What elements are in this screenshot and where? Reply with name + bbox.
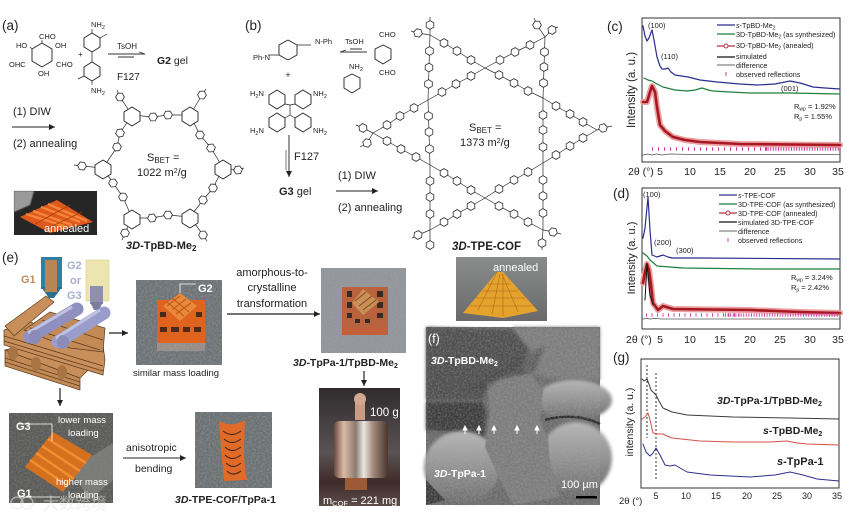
monomer: dimethyl benzidine: NH — [91, 20, 102, 29]
surface area label: 2 — [497, 138, 501, 145]
compound name: 2 — [192, 244, 197, 253]
curve labels: 2 — [818, 401, 822, 408]
peak labels and fit values: R — [794, 112, 799, 121]
chart frame and tick labels: 20 — [744, 334, 756, 346]
arrow to photo G2 — [109, 332, 128, 334]
monomer: triformylphloroglucinol: OHC — [9, 60, 26, 69]
compound name: 3D-TpBD-Me — [126, 240, 192, 252]
monomer: terephthal imine: + — [285, 70, 291, 80]
equilibrium arrows with products: TsOH — [345, 37, 364, 46]
legend: 3D-TpBD-Me — [736, 30, 778, 39]
panel: (a) TpBD-Me2 synthesis — [2, 18, 244, 253]
legend: 2 — [778, 34, 781, 40]
monomer: tetraaminophenylethene: N — [258, 126, 264, 135]
peak labels and fit values — [648, 21, 836, 122]
peak labels and fit values: (300) — [676, 246, 694, 255]
chart frame and tick labels: 15 — [714, 166, 726, 178]
watermark — [11, 494, 107, 513]
axis title y: intensity (a. u.) — [624, 388, 636, 456]
monomer: triformylphloroglucinol: OH — [38, 69, 49, 78]
arrow to G3 gel: G3 gel — [279, 186, 311, 198]
surface area label: /g — [501, 137, 510, 149]
surface area label — [137, 152, 187, 179]
arrow down to G3 photo — [59, 388, 61, 406]
arrow to G3 gel — [279, 135, 319, 198]
equilibrium arrows with products: 2 — [360, 67, 363, 73]
chart frame and tick labels: 5 — [657, 334, 663, 346]
equilibrium arrows with products: CHO — [379, 30, 396, 39]
chart frame and tick labels: 25 — [774, 334, 786, 346]
curves — [643, 197, 840, 319]
photo: bent scaffold — [195, 412, 272, 488]
chart frame and tick labels: 20 — [744, 166, 756, 178]
equilibrium arrows with products: CHO — [379, 68, 396, 77]
chart frame and tick labels: 25 — [774, 166, 786, 178]
axis title y: Intensity (a. u.) — [626, 222, 638, 294]
molecular network: 3D-TPE-COF — [356, 17, 612, 250]
process step: DIW and annealing — [336, 170, 402, 214]
surface area label: 2 — [174, 168, 178, 175]
monomer: triformylphloroglucinol: CHO — [39, 32, 56, 41]
surface area label: = — [170, 152, 179, 164]
monomer: triformylphloroglucinol: HO — [16, 41, 27, 50]
watermark: 大数跨境 — [43, 494, 107, 513]
photo: similar mass loading scaffold: G2 — [198, 283, 213, 295]
curve labels: s-TpBD-Me — [763, 425, 818, 437]
chart frame and tick labels: 2θ (°) — [628, 166, 654, 178]
text and arrow: anisotropic bending — [123, 442, 186, 475]
printer illustration — [4, 257, 109, 390]
peak labels and fit values: = 2.42% — [799, 283, 829, 292]
monomer: triformylphloroglucinol: + — [78, 50, 83, 59]
legend: difference — [738, 227, 769, 236]
text and arrow: anisotropic bending: anisotropic — [126, 442, 177, 454]
legend: s-TPE-COF — [738, 191, 776, 200]
monomer: tetraaminophenylethene: NH — [313, 126, 324, 135]
monomer: tetraaminophenylethene: 2 — [255, 131, 258, 137]
monomer: tetraaminophenylethene: H — [250, 126, 255, 135]
monomer: triformylphloroglucinol — [9, 32, 83, 78]
photo: composite scaffold — [321, 268, 406, 353]
monomer: tetraaminophenylethene: 2 — [324, 131, 327, 137]
monomer: tetraaminophenylethene — [250, 89, 327, 137]
surface area label: = — [492, 122, 501, 134]
photo: 100 g weight on scaffold — [319, 388, 400, 508]
curve labels: 2 — [818, 431, 822, 438]
monomer: tetraaminophenylethene: NH — [313, 89, 324, 98]
legend: observed reflections — [738, 236, 803, 245]
monomer: terephthal imine: Ph-N — [253, 53, 270, 62]
printer illustration: or — [70, 275, 82, 287]
arrow to photo TpPa-1/TpBD-Me2 — [227, 313, 320, 315]
peak labels and fit values: = 1.92% — [806, 102, 836, 111]
photo: 100 g weight on scaffold: m — [323, 495, 332, 507]
legend: s-TpBD-Me — [736, 21, 773, 30]
photo: annealed pyramid: annealed — [493, 262, 538, 274]
surface area label: BET — [154, 156, 170, 165]
chart frame and tick labels — [626, 188, 844, 346]
panel: (e) direct ink writing process — [2, 250, 547, 508]
monomer: dimethyl benzidine: NH — [91, 86, 102, 95]
monomer: terephthal imine: N-Ph — [315, 37, 332, 46]
legend: 3D-TpBD-Me — [736, 41, 778, 50]
arrow to G3 gel: F127 — [294, 151, 319, 163]
monomer: tetraaminophenylethene: 2 — [324, 94, 327, 100]
text: transformation step: crystalline — [248, 282, 296, 294]
monomer: terephthal imine — [253, 37, 332, 80]
panel: (f) SEM image — [424, 327, 612, 505]
legend: 2 — [778, 46, 781, 52]
region label TpBD-Me2: 3D-TpBD-Me — [431, 355, 494, 367]
chart frame and tick labels: 30 — [804, 166, 816, 178]
legend: 3D-TPE-COF (annealed) — [738, 209, 818, 218]
reaction arrow to G2 gel: TsOH — [117, 42, 137, 51]
panel: (b) TPE-COF synthesis — [245, 17, 612, 253]
reaction arrow to G2 gel: F127 — [117, 72, 140, 83]
monomer: tetraaminophenylethene: 2 — [255, 94, 258, 100]
process step: DIW and annealing: (2) annealing — [338, 202, 402, 214]
peak labels and fit values: = 1.55% — [802, 112, 832, 121]
monomer: triformylphloroglucinol: OH — [55, 41, 66, 50]
label (d): (d) — [613, 186, 630, 201]
peak labels and fit values: R — [791, 273, 796, 282]
panel: (d) PXRD of TPE-COF — [613, 186, 844, 346]
legend — [717, 21, 835, 79]
axis title y: Intensity (a. u.) — [626, 52, 638, 128]
interface arrows — [463, 426, 539, 434]
panel: (g) PXRD comparison — [613, 350, 842, 507]
monomer: dimethyl benzidine — [78, 20, 107, 97]
photo: annealed lattice — [14, 191, 97, 235]
chart frame and tick labels: 10 — [684, 334, 696, 346]
surface area label: S — [469, 122, 476, 134]
chart frame and tick labels: 30 — [802, 491, 812, 501]
region label TpPa-1: 3D-TpPa-1 — [434, 468, 486, 480]
peak labels and fit values: p — [796, 288, 799, 294]
compound name: 3D-TPE-COF/TpPa-1 — [175, 494, 276, 506]
photo: G3 on lattice: higher mass — [56, 477, 108, 488]
molecular network: 3D-TpBD-Me2 — [74, 89, 244, 241]
peak labels and fit values: p — [799, 116, 802, 122]
chart frame and tick labels: 5 — [653, 491, 659, 501]
process step: DIW and annealing: (2) annealing — [13, 138, 77, 150]
peak labels and fit values: (200) — [654, 238, 672, 247]
text and arrow: anisotropic bending: bending — [135, 463, 173, 475]
monomer: tetraaminophenylethene: N — [258, 89, 264, 98]
peak labels and fit values: R — [794, 102, 799, 111]
photo: 100 g weight on scaffold: 100 g — [370, 407, 399, 419]
surface area label — [460, 122, 510, 149]
surface area label: S — [147, 152, 154, 164]
surface area label: BET — [476, 126, 492, 135]
equilibrium arrows with products: NH — [349, 62, 360, 71]
chart frame and tick labels: 25 — [772, 491, 782, 501]
reaction arrow to G2 gel — [108, 42, 188, 83]
peak labels and fit values: (110) — [661, 52, 678, 61]
legend: simulated — [736, 52, 767, 61]
scale bar: 100 µm — [561, 479, 598, 491]
photo: annealed pyramid — [456, 257, 547, 321]
photo: G3 on lattice: G1 — [17, 488, 32, 500]
label (b): (b) — [245, 18, 262, 33]
photo: G3 on lattice: lower mass — [58, 415, 106, 426]
curve labels: s-TpPa-1 — [777, 456, 823, 468]
chart frame and tick labels: 15 — [711, 491, 721, 501]
chart frame and tick labels — [628, 18, 844, 178]
peak labels and fit values: = 3.24% — [803, 273, 833, 282]
photo: G3 on lattice: loading — [68, 490, 99, 501]
panel: (c) PXRD of TpBD-Me2 — [607, 18, 844, 178]
monomer: tetraaminophenylethene: H — [250, 89, 255, 98]
surface area label: 1373 m — [460, 137, 497, 149]
photo: similar mass loading scaffold — [136, 280, 222, 365]
chart frame and tick labels: 2θ (°) — [619, 496, 642, 507]
process step: DIW and annealing: (1) DIW — [13, 106, 52, 118]
chart frame and tick labels: 2θ (°) — [626, 334, 652, 346]
printer illustration: G3 — [67, 290, 82, 302]
label (c): (c) — [607, 19, 623, 34]
chart frame and tick labels: 20 — [742, 491, 752, 501]
reaction arrow to G2 gel: G2 gel — [157, 55, 188, 67]
photo: 100 g weight on scaffold: COF — [332, 499, 348, 508]
curves — [643, 26, 840, 155]
curves and guide lines — [642, 365, 839, 481]
legend: difference — [736, 61, 767, 70]
chart frame and tick labels: 10 — [684, 166, 696, 178]
monomer: dimethyl benzidine: 2 — [102, 91, 105, 97]
monomer: dimethyl benzidine: 2 — [102, 25, 105, 31]
peak labels and fit values — [643, 190, 833, 294]
scale bar — [561, 479, 598, 498]
label (g): (g) — [613, 350, 630, 365]
peak labels and fit values: (100) — [643, 190, 661, 199]
chart frame and tick labels: 35 — [832, 166, 844, 178]
surface area label: /g — [178, 167, 187, 179]
peak labels and fit values: wp — [796, 278, 803, 284]
chart frame and tick labels: 35 — [832, 334, 844, 346]
legend: 2 — [773, 26, 776, 32]
text: transformation step: transformation — [237, 298, 307, 310]
legend — [719, 191, 835, 245]
region label (f): (f) — [428, 332, 440, 346]
legend: (anealed) — [781, 41, 814, 50]
peak labels and fit values: (001) — [781, 84, 799, 93]
chart frame and tick labels: 35 — [832, 491, 842, 501]
equilibrium arrows with products — [340, 30, 396, 93]
chart frame and tick labels — [619, 359, 842, 507]
SEM background and regions — [424, 327, 612, 505]
photo: annealed lattice: annealed — [44, 223, 89, 235]
process step: DIW and annealing: (1) DIW — [338, 170, 376, 182]
printer illustration: G1 — [21, 274, 36, 286]
legend: simulated 3D-TPE-COF — [738, 218, 814, 227]
peak labels and fit values: R — [791, 283, 796, 292]
label (a): (a) — [2, 18, 18, 33]
peak labels and fit values: wp — [799, 106, 806, 112]
chart frame and tick labels: 30 — [804, 334, 816, 346]
printer illustration: G2 — [67, 260, 82, 272]
caption: similar mass loading — [133, 368, 219, 379]
photo: G3 on lattice: G3 — [16, 421, 31, 433]
photo: G3 on lattice: loading — [68, 428, 99, 439]
process step: DIW and annealing — [12, 106, 77, 150]
text: transformation step — [236, 267, 308, 310]
chart frame and tick labels: 15 — [714, 334, 726, 346]
peak labels and fit values: (100) — [648, 21, 666, 30]
legend: 3D-TPE-COF (as synthesized) — [738, 200, 835, 209]
text: transformation step: amorphous-to- — [236, 267, 308, 279]
curve labels: 3D-TpPa-1/TpBD-Me — [717, 395, 818, 407]
curve labels — [717, 395, 823, 468]
surface area label: 1022 m — [137, 167, 174, 179]
chart frame and tick labels: 10 — [681, 491, 691, 501]
chart frame and tick labels: 5 — [657, 166, 663, 178]
region label TpBD-Me2: 2 — [494, 361, 498, 368]
photo: G3 on lattice — [9, 413, 113, 503]
legend: observed reflections — [736, 70, 801, 79]
arrow to weight photo — [363, 371, 365, 386]
monomer: triformylphloroglucinol: CHO — [56, 60, 73, 69]
compound name: 3D-TpPa-1/TpBD-Me — [293, 357, 394, 369]
label (e): (e) — [2, 250, 18, 265]
legend: (as synthesized) — [781, 30, 835, 39]
compound name: 3D-TPE-COF — [452, 241, 521, 253]
photo: 100 g weight on scaffold: = 221 mg — [348, 495, 397, 507]
compound name: 2 — [394, 363, 398, 370]
